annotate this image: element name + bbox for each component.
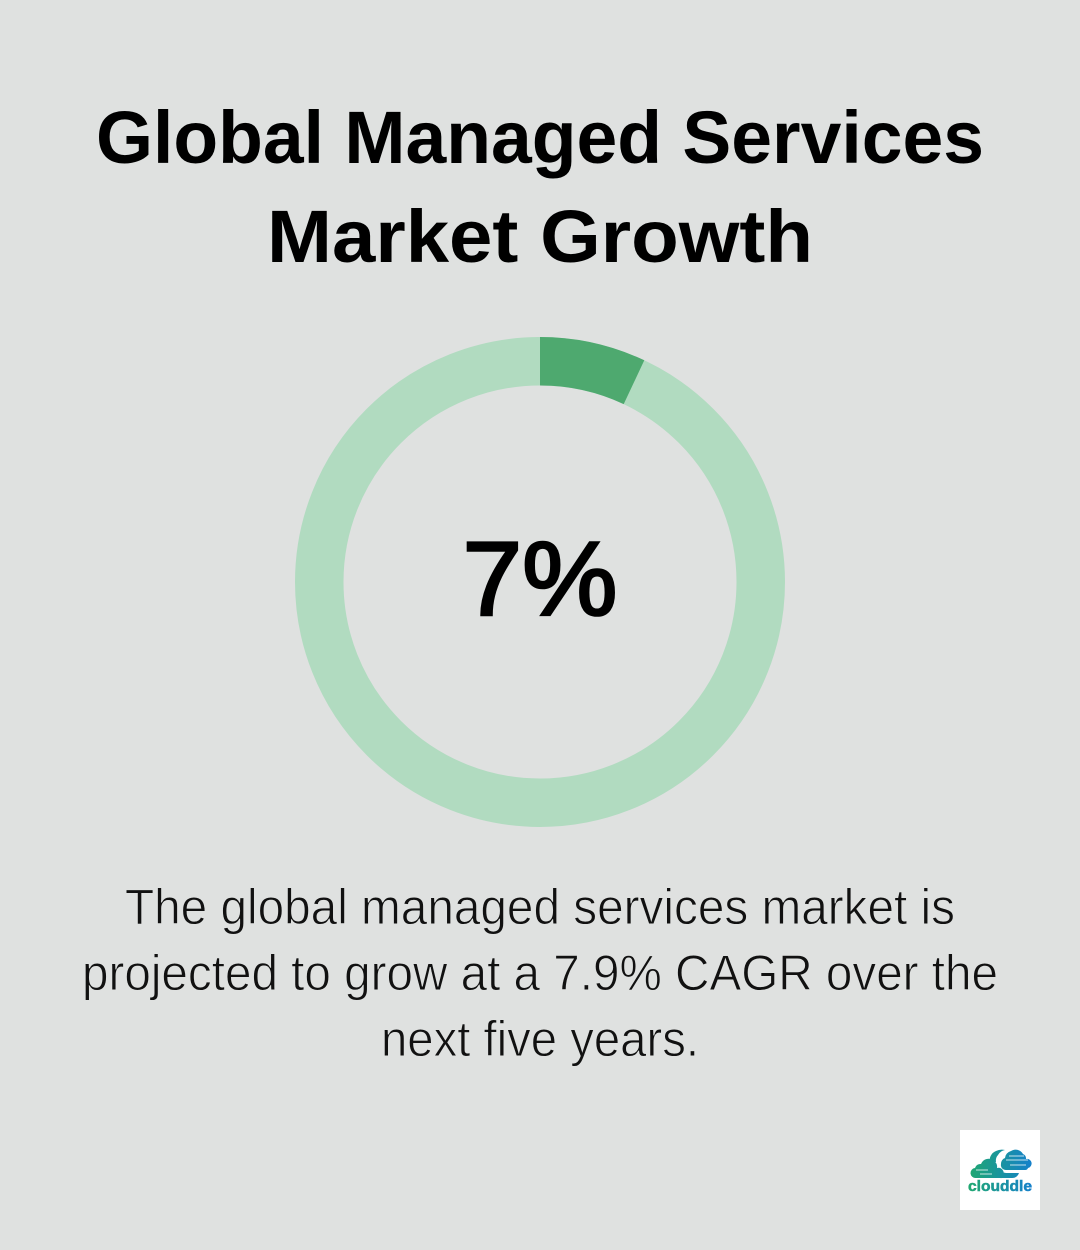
donut 7% segment <box>540 337 644 404</box>
logo wordmark: clouddle <box>968 1179 1032 1195</box>
left cloud <box>970 1159 1004 1178</box>
donut track <box>319 361 761 803</box>
right cloud <box>1001 1150 1032 1170</box>
title: Market Growth <box>267 195 813 278</box>
logo background <box>960 1130 1040 1210</box>
logo: clouddle <box>960 1130 1040 1210</box>
description text: projected to grow at a 7.9% CAGR over the <box>82 945 998 1001</box>
description text: The global managed services market is <box>125 879 955 935</box>
icon: clouds <box>970 1150 1032 1178</box>
crescent <box>990 1150 1005 1163</box>
center value: 7% <box>462 521 618 638</box>
title: Global Managed Services <box>96 96 984 179</box>
lower swoosh <box>997 1169 1019 1178</box>
title <box>96 96 984 278</box>
description text: next five years. <box>381 1011 699 1067</box>
description text <box>82 879 998 1067</box>
circuit lines <box>976 1156 1028 1174</box>
donut chart <box>319 337 761 803</box>
